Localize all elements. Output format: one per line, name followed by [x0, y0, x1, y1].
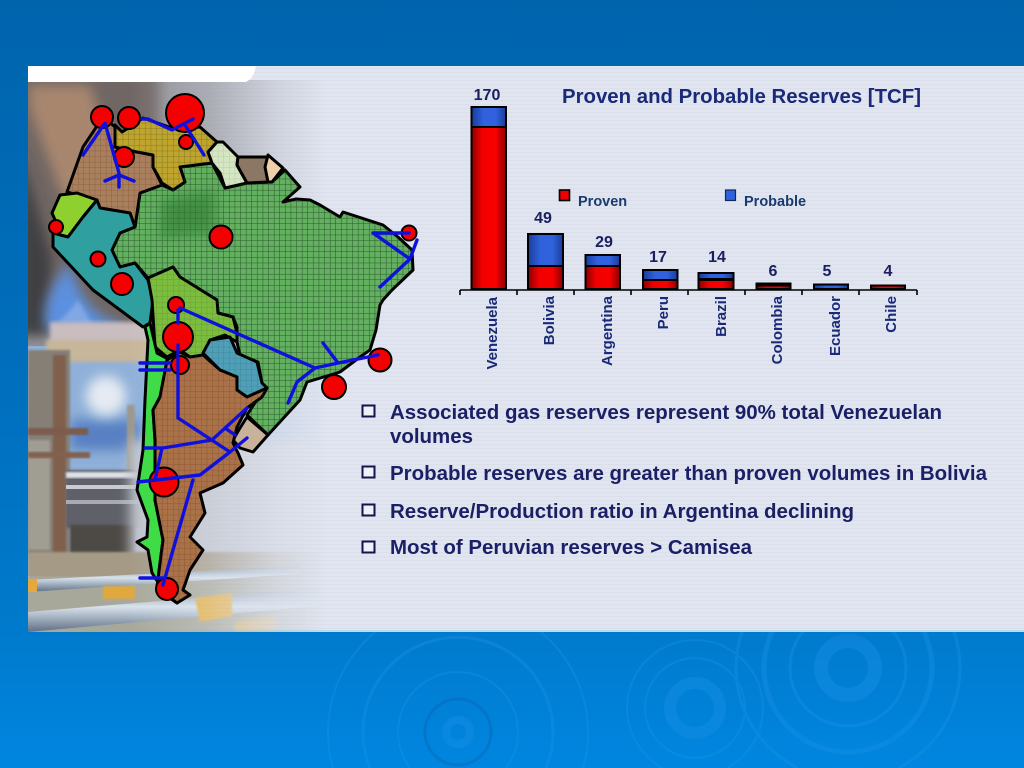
- bullet 2: Probable reserves are greater than proven volumes in Bolivia: [390, 463, 988, 485]
- bar: Argentina: [586, 255, 620, 289]
- bullet 4: Most of Peruvian reserves > Camisea: [390, 537, 753, 559]
- country labels: Colombia: [769, 295, 786, 364]
- bar: Ecuador: [814, 284, 848, 289]
- legend: [560, 190, 806, 210]
- country labels: Bolivia: [541, 295, 558, 345]
- ripple decoration, lower band: [327, 632, 962, 768]
- country labels: Venezuela: [484, 296, 501, 370]
- country: Venezuela: [115, 118, 217, 190]
- country group: [52, 117, 413, 603]
- value labels: 6: [769, 263, 778, 280]
- value labels: [474, 87, 893, 280]
- country: Argentina: [153, 352, 267, 603]
- white header tab: [28, 66, 256, 82]
- country: Chile: [137, 323, 177, 603]
- bar: Colombia: [756, 284, 790, 289]
- map of South America: [49, 94, 417, 603]
- country: French Guiana: [265, 155, 283, 182]
- bar: Brazil: [698, 273, 734, 289]
- country: Ecuador: [52, 193, 97, 237]
- background photo: gas flame, refinery and pipes: [28, 80, 306, 632]
- gas pipelines: [83, 119, 417, 585]
- country: Uruguay: [233, 417, 268, 452]
- bullet list: [362, 402, 988, 559]
- bullet 3: Reserve/Production ratio in Argentina declining: [390, 501, 854, 523]
- country: Bolivia: [148, 267, 237, 357]
- bar: Peru: [643, 270, 678, 289]
- country labels: Argentina: [599, 295, 616, 366]
- chart title: Proven and Probable Reserves [TCF]: [562, 86, 921, 108]
- bars: [472, 107, 905, 289]
- legend: probable: [726, 190, 806, 210]
- country labels: Ecuador: [827, 296, 844, 356]
- map grid overlay: [67, 117, 413, 603]
- country: Paraguay: [203, 337, 267, 397]
- value labels: 17: [649, 249, 667, 266]
- bullet 1: volumes: [390, 426, 473, 448]
- bullet 1: [362, 402, 942, 448]
- bar: Venezuela: [472, 107, 506, 289]
- bullet 1: Associated gas reserves represent 90% total Venezuelan: [390, 402, 942, 424]
- country: Guyana: [208, 142, 247, 188]
- bar chart: reserves by country: [460, 87, 917, 370]
- country: Colombia: [67, 117, 162, 227]
- legend: proven: [560, 190, 627, 210]
- country labels: Chile: [883, 296, 900, 333]
- legend: probable: Probable: [744, 194, 806, 210]
- country labels: Brazil: [713, 296, 730, 337]
- axis: [460, 290, 917, 295]
- value labels: 170: [474, 87, 500, 104]
- country: Brazil: [112, 163, 413, 435]
- bar: Bolivia: [528, 234, 563, 289]
- value labels: 14: [708, 249, 726, 266]
- value labels: 29: [595, 234, 613, 251]
- country: Peru: [53, 200, 153, 327]
- dark shading over the Amazon: [160, 190, 215, 238]
- value labels: 5: [823, 263, 832, 280]
- content panel: [20, 66, 1024, 632]
- country labels: Peru: [655, 296, 672, 329]
- value labels: 49: [534, 210, 552, 227]
- bar: Chile: [871, 286, 905, 289]
- gas field markers: [49, 94, 416, 600]
- legend: proven: Proven: [578, 194, 627, 210]
- country labels: [484, 295, 900, 370]
- country: Suriname: [237, 157, 268, 183]
- value labels: 4: [884, 263, 893, 280]
